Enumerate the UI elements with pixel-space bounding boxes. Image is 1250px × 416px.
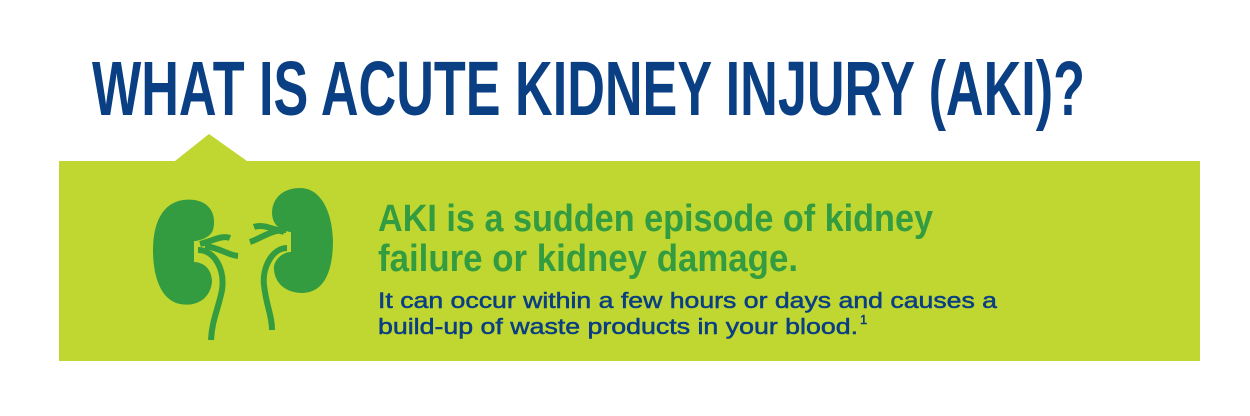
ureters and vessels [198,226,287,340]
heading: green statement: failure or kidney damage. [378,238,798,280]
panel: definition [59,134,1200,361]
icon: kidneys [153,188,333,340]
text block: description [378,288,998,339]
text block: description: build-up of waste products in your blood. [378,314,858,339]
right kidney [272,188,333,293]
hilum lines [195,232,290,262]
text block: description: It can occur within a few hours or days and causes a [378,288,998,313]
heading: green statement: AKI is a sudden episode of kidney [378,198,933,240]
text block: description: 1 [860,312,867,327]
heading: green statement [378,198,933,280]
left kidney [153,200,214,305]
